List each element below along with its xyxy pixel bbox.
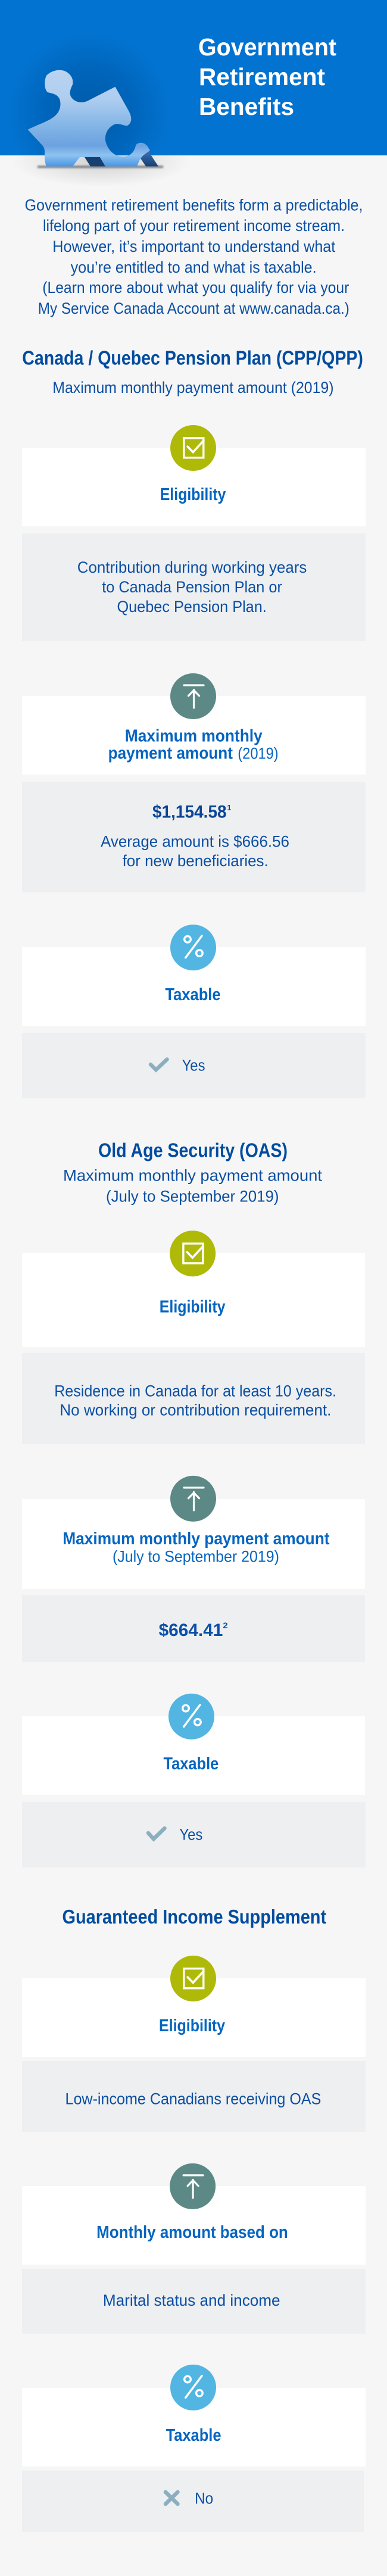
icon: percent [170,2365,216,2410]
card title: (July to September 2019) [113,1547,279,1565]
card title: Taxable [165,985,221,1004]
card title: Taxable [166,2426,221,2445]
card title: payment amount [108,744,233,763]
title: Retirement [199,63,325,90]
card title: Maximum monthly payment amount [63,1529,330,1548]
icon: check mark [151,1060,167,1070]
panel: CPP eligibility [22,425,366,641]
card title: Eligibility [160,485,226,504]
icon: checkbox [170,1231,216,1276]
card text: Residence in Canada for at least 10 years. [54,1382,336,1400]
amount: 1 [227,803,231,812]
title: Benefits [199,93,294,120]
icon: check mark [148,1828,164,1839]
card text [77,558,307,616]
panel: GIS eligibility [22,1956,366,2132]
card title: Taxable [163,1754,219,1773]
card text: Quebec Pension Plan. [117,598,267,616]
card text: Low-income Canadians receiving OAS [65,2090,321,2107]
answer: Yes [179,1826,202,1844]
icon: cross [166,2492,177,2504]
panel: OAS taxable [22,1694,366,1868]
card title: Maximum monthly [125,727,263,746]
card title [108,727,279,763]
card text: Marital status and income [103,2291,280,2309]
intro text: (Learn more about what you qualify for via your [42,279,349,296]
card text: for new beneficiaries. [123,852,269,870]
heading: OAS: (July to September 2019) [106,1187,279,1205]
answer: No [195,2490,213,2508]
answer: Yes [182,1056,205,1074]
heading: OAS [63,1139,323,1205]
card text: to Canada Pension Plan or [102,578,282,596]
panel: GIS taxable [22,2365,366,2532]
intro text [25,196,363,317]
card text [101,832,289,870]
card title: Eligibility [159,2016,225,2035]
card text: Average amount is $666.56 [101,832,289,850]
panel: CPP taxable [22,925,366,1098]
heading: CPP/QPP: Maximum monthly payment amount (2019) [52,379,334,396]
icon: percent [168,1694,214,1740]
panel: GIS monthly amount [22,2163,366,2334]
icon: arrow to top [170,2163,216,2209]
header banner [0,0,387,155]
panel: OAS maximum payment [22,1476,365,1662]
intro text: lifelong part of your retirement income stream. [43,217,345,235]
card title: (2019) [238,745,279,763]
heading: CPP/QPP [22,347,363,396]
intro text: Government retirement benefits form a predictable, [25,196,363,214]
icon: percent [170,925,216,970]
icon: checkbox [170,1956,216,2002]
card title: Eligibility [160,1297,225,1316]
heading: Guaranteed Income Supplement: Guaranteed Income Supplement [62,1906,326,1928]
intro text: However, it’s important to understand what [52,238,336,255]
card text: No working or contribution requirement. [60,1401,331,1419]
amount: $664.41 [159,1620,223,1640]
icon: arrow to top [170,1476,216,1522]
heading: OAS: Maximum monthly payment amount [63,1167,323,1185]
title [198,33,336,120]
amount: $1,154.58 [152,802,227,822]
amount: 2 [223,1620,228,1630]
heading: OAS: Old Age Security (OAS) [98,1139,288,1161]
panel: OAS eligibility [22,1231,365,1444]
icon: checkbox [170,425,216,471]
title: Government [198,33,336,61]
icon: arrow to top [170,673,216,719]
card text [54,1382,336,1419]
card title: Monthly amount based on [96,2223,288,2242]
card text: Contribution during working years [77,558,307,576]
card title [63,1529,330,1565]
panel: CPP maximum payment [22,673,366,892]
intro text: you’re entitled to and what is taxable. [71,258,317,276]
intro text: My Service Canada Account at www.canada.ca.) [38,299,349,317]
icon: puzzle piece [12,70,191,189]
